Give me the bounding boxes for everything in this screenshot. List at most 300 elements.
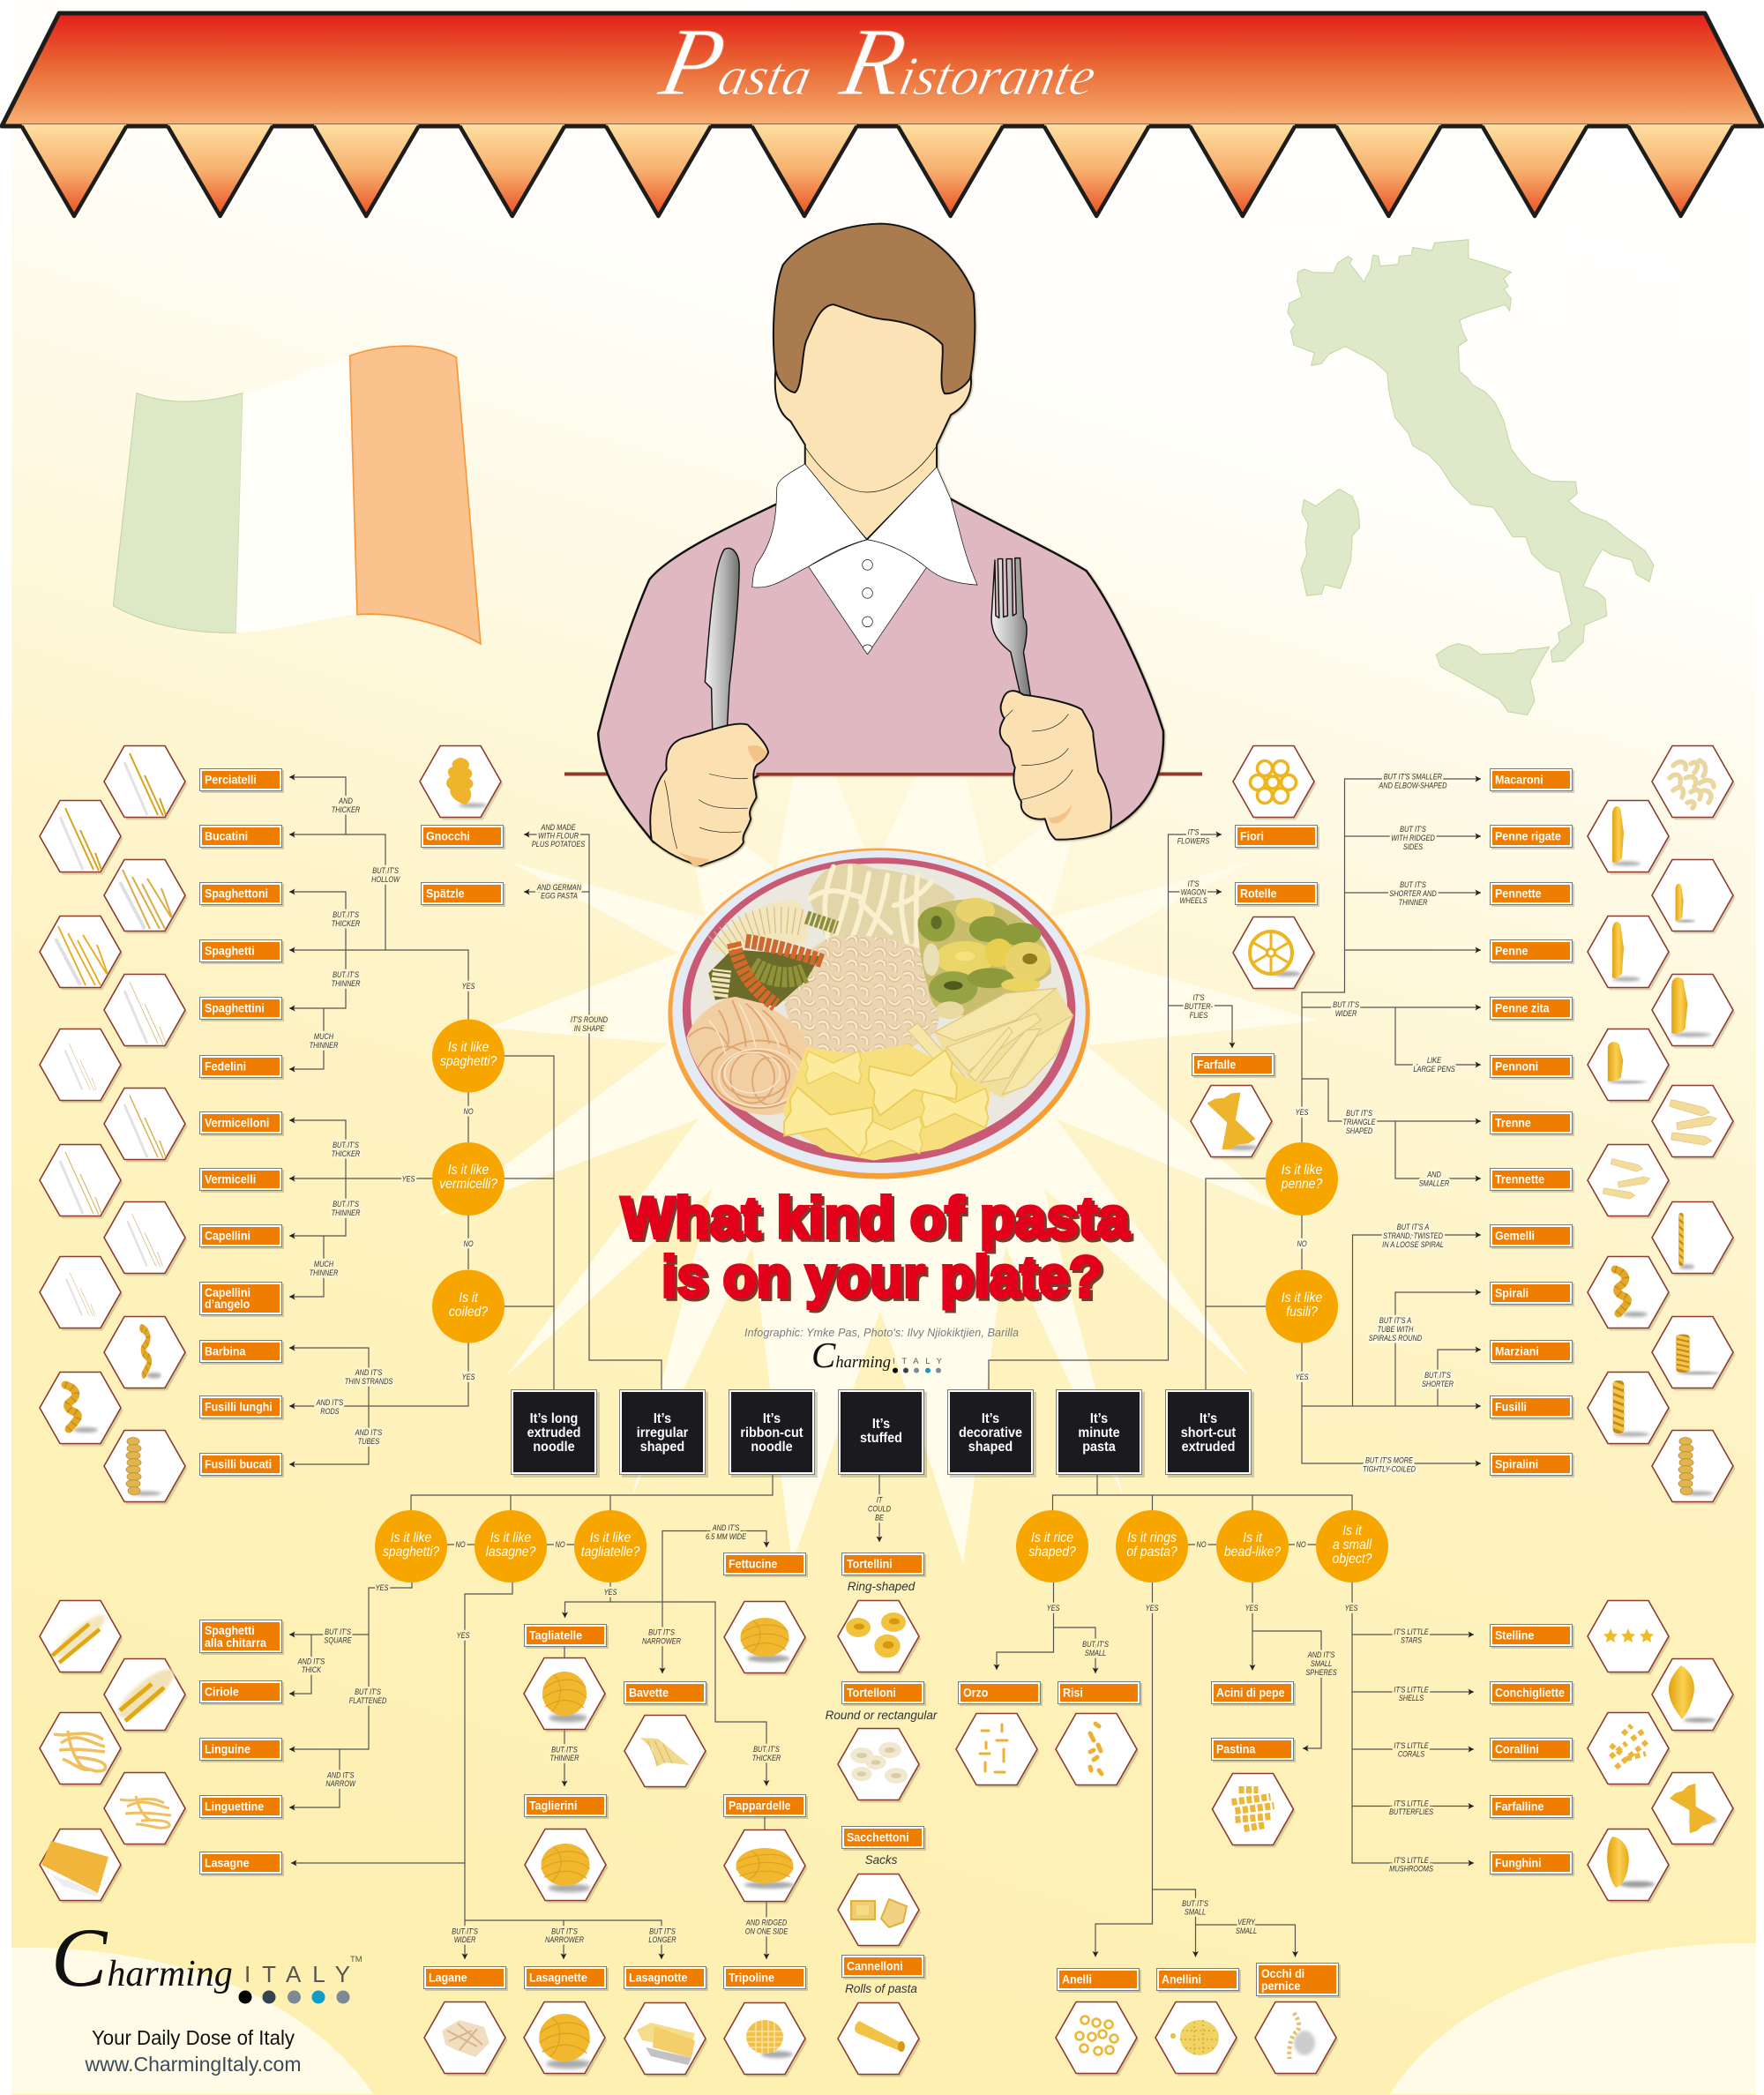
small Charming Italy logo [811, 1335, 943, 1375]
flow labels: minute pasta: STARS [1401, 1635, 1422, 1645]
icon: Gnocchi [420, 746, 503, 820]
category: irregular shaped: shaped [640, 1439, 684, 1455]
name: Capellini [199, 1224, 284, 1249]
icon: Bucatini [40, 801, 123, 875]
flow labels: minute pasta: SMALL [1185, 1907, 1206, 1917]
flow labels: left column: RODS [320, 1406, 340, 1416]
name: Tagliatelle: Tagliatelle [529, 1628, 582, 1642]
name: Pastina [1212, 1738, 1296, 1762]
category: irregular shaped [619, 1390, 708, 1478]
name: Spätzle: Spätzle [426, 887, 465, 901]
icon: Trenne [1652, 1085, 1736, 1159]
flow labels: right column: SHORTER [1422, 1379, 1454, 1388]
category: irregular shaped: irregular [637, 1425, 688, 1440]
name: Capellini: Capellini [205, 1229, 250, 1243]
name: Trenne: Trenne [1495, 1116, 1531, 1130]
flow labels: minute pasta: AND IT'S [1308, 1650, 1334, 1659]
flow labels: right column: AND [1427, 1170, 1441, 1179]
flow labels: left column: PLUS POTATOES [532, 839, 586, 849]
icon: Fusilli bucati [104, 1431, 187, 1505]
icon: Penne rigate [1588, 801, 1671, 875]
name: Taglierini: Taglierini [529, 1799, 577, 1813]
person at table [598, 224, 1163, 866]
Charming Italy logo: TM [350, 1955, 363, 1964]
name: Spirali [1491, 1283, 1574, 1306]
question: Is it like spaghetti? (ribbon): Is it like [391, 1530, 431, 1545]
question: Is it like lasagne?: Is it like [490, 1530, 531, 1545]
name: Macaroni: Macaroni [1495, 773, 1544, 787]
flow labels: right column: TUBE WITH [1378, 1324, 1414, 1334]
name: Rotelle: Rotelle [1240, 887, 1277, 901]
flow labels: left column: HOLLOW [371, 874, 400, 884]
flow labels: minute pasta: IT'S LITTLE [1394, 1627, 1429, 1636]
name: Linguine: Linguine [205, 1742, 250, 1756]
flow labels: left column: BUT IT'S [333, 909, 359, 919]
connectors: ribbon-cut noodle tree [289, 1475, 773, 1959]
icon: Cannelloni [838, 2002, 921, 2076]
name: Fusilli lunghi: Fusilli lunghi [205, 1400, 273, 1414]
flow labels: minute pasta: SMALL [1311, 1658, 1332, 1668]
name: Fettucine: Fettucine [729, 1557, 777, 1571]
flow labels: right column: BUT IT'S [1424, 1370, 1451, 1380]
category: stuffed: stuffed [860, 1430, 902, 1446]
icon: Tagliatelle [524, 1658, 607, 1732]
name: Fusilli: Fusilli [1495, 1400, 1527, 1414]
name: Lasagnotte: Lasagnotte [629, 1971, 687, 1985]
flow labels: right column: WHEELS [1179, 895, 1207, 905]
name: Ciriole: Ciriole [205, 1685, 239, 1699]
name: Spaghettini: Spaghettini [205, 1001, 265, 1015]
flow labels: right column: BUT IT'S [1400, 824, 1426, 834]
icon: Vermicelli [40, 1145, 123, 1219]
flow labels: right column: BUT IT'S [1400, 879, 1426, 889]
flow labels: left column: AND GERMAN [537, 882, 581, 892]
flow labels: minute pasta [1047, 1539, 1433, 1935]
icon: Bavette [624, 1715, 707, 1789]
flow labels: ribbon-cut and stuffed: FLATTENED [349, 1695, 386, 1705]
question: Is it rings of pasta?: Is it rings [1127, 1530, 1177, 1545]
stuffed pasta caption: Sacks: Sacks [865, 1853, 898, 1867]
flow labels: minute pasta: IT'S LITTLE [1394, 1685, 1429, 1695]
flow labels: right column: SIDES [1403, 842, 1423, 851]
question: Is it a small object?: Is it [1342, 1523, 1363, 1538]
name: Lasagnotte [624, 1967, 708, 1991]
connectors: long extruded noodle tree [289, 777, 554, 1464]
flow labels: left column: AND IT'S [355, 1427, 382, 1437]
question: Is it like spaghetti? [432, 1020, 505, 1092]
small Charming Italy logo: Charming [811, 1335, 891, 1375]
shirt buttons [863, 560, 872, 655]
chin line [805, 446, 937, 492]
flow labels: minute pasta: IT'S LITTLE [1394, 1855, 1429, 1865]
farfalle [781, 1044, 990, 1160]
category: ribbon-cut noodle: noodle [751, 1439, 793, 1455]
name: Fusilli bucati [199, 1454, 284, 1478]
flow labels: ribbon-cut and stuffed: ON ONE SIDE [745, 1927, 789, 1936]
flow labels: left column: NO [464, 1238, 474, 1248]
plate of pasta photo [668, 848, 1090, 1179]
banner title: Ristorante [832, 9, 1109, 116]
banner title [651, 9, 1109, 116]
flow labels: minute pasta: SPHERES [1305, 1667, 1337, 1677]
name: Lasagne [199, 1852, 284, 1876]
category: ribbon-cut noodle [729, 1390, 818, 1478]
name: Cannelloni [841, 1955, 926, 1979]
category: ribbon-cut noodle: It’s [763, 1410, 781, 1426]
name: Risi: Risi [1063, 1686, 1083, 1700]
banner title: Pasta [651, 9, 825, 116]
icon: Linguettine [104, 1773, 187, 1847]
spaghetti nest [686, 995, 816, 1115]
right collar [868, 467, 977, 585]
icon: Spaghetti [40, 916, 123, 990]
icon: Gemelli [1652, 1201, 1736, 1276]
tricolour fusilli [708, 917, 837, 1006]
flow labels: ribbon-cut and stuffed [297, 1495, 891, 1944]
flow labels: left column: BUT IT'S [333, 1199, 359, 1208]
name: Perciatelli [199, 769, 284, 793]
stuffed pasta caption: Ring-shaped: Ring-shaped [848, 1580, 916, 1593]
flow labels: left column: AND IT'S [317, 1397, 343, 1407]
icon: Tortellini [838, 1600, 921, 1674]
icon: Farfalline [1652, 1773, 1736, 1847]
name: Pennette [1491, 882, 1574, 907]
name: Linguettine: Linguettine [205, 1799, 264, 1814]
question: Is it coiled?: coiled? [449, 1305, 489, 1320]
flow labels: left column: THIN STRANDS [345, 1376, 393, 1386]
icon: Fusilli [1588, 1373, 1671, 1447]
name: Anelli [1057, 1969, 1141, 1993]
connectors: irregular shaped tree [524, 834, 662, 1389]
flow labels: right column: IT'S [1193, 992, 1204, 1002]
flow labels: ribbon-cut and stuffed: YES [604, 1587, 617, 1597]
question: Is it like spaghetti?: spaghetti? [440, 1054, 497, 1069]
category: short-cut extruded: short-cut [1181, 1425, 1236, 1440]
table edge [564, 773, 1202, 776]
flow labels: right column: BUT IT'S [1333, 999, 1359, 1009]
flow labels: ribbon-cut and stuffed: YES [457, 1630, 470, 1640]
name: Stelline: Stelline [1495, 1628, 1534, 1642]
icon: Ciriole [104, 1658, 187, 1732]
name: Penne rigate [1491, 826, 1574, 849]
flow labels: right column: WAGON [1181, 887, 1207, 897]
icon: Fettucine [724, 1602, 808, 1676]
question: Is it like penne?: penne? [1281, 1177, 1323, 1192]
flow labels: left column: MUCH [314, 1259, 333, 1268]
icon: Spaghettini [104, 974, 187, 1048]
category: ribbon-cut noodle: ribbon-cut [740, 1425, 804, 1440]
name: Linguettine [199, 1796, 284, 1820]
hair [774, 224, 975, 393]
icon: Lasagnotte [624, 2002, 707, 2076]
name: Pappardelle: Pappardelle [729, 1799, 791, 1813]
flow labels: minute pasta: IT'S LITTLE [1394, 1740, 1429, 1750]
category: short-cut extruded: extruded [1182, 1439, 1235, 1455]
flow labels: left column: WITH FLOUR [538, 831, 579, 841]
icon: Linguine [40, 1713, 123, 1787]
flow labels: right column: LARGE PENS [1413, 1064, 1455, 1074]
name: Lasagnette [524, 1967, 609, 1991]
name: Corallini: Corallini [1495, 1742, 1539, 1756]
sweater hem [757, 773, 1017, 775]
name: Spaghetti alla chitarra: alla chitarra [205, 1635, 267, 1650]
question: Is it rice shaped? [1016, 1510, 1088, 1582]
icon: Pennette [1652, 859, 1736, 933]
name: Perciatelli: Perciatelli [205, 773, 257, 787]
flow labels: minute pasta: VERY [1237, 1917, 1255, 1927]
name: Tortellini: Tortellini [847, 1557, 893, 1571]
name: Ciriole [199, 1681, 284, 1705]
flow labels: left column: BUT IT'S [333, 1140, 359, 1149]
flow labels: left column: YES [402, 1174, 415, 1184]
name: Gemelli [1491, 1224, 1574, 1249]
category: long extruded noodle [512, 1390, 600, 1478]
flow labels: ribbon-cut and stuffed: NARROW [325, 1778, 356, 1788]
flow labels: right column: SMALLER [1419, 1178, 1449, 1188]
name: Tortellini [841, 1553, 926, 1577]
flow labels: right column: WIDER [1335, 1008, 1357, 1018]
question: Is it like penne? [1266, 1142, 1338, 1216]
category: stuffed [838, 1390, 927, 1478]
flow labels: right column [1177, 772, 1455, 1474]
penne [908, 988, 1073, 1098]
icon: Pappardelle [724, 1829, 808, 1904]
flow labels: minute pasta: SMALL [1085, 1648, 1106, 1657]
icon: Orzo [956, 1713, 1039, 1787]
name: Rotelle [1235, 882, 1319, 907]
name: Anellini [1157, 1969, 1241, 1993]
connectors: short-cut extruded tree [1206, 779, 1481, 1463]
flag [113, 346, 481, 644]
macaroni pile [783, 935, 940, 1058]
flow labels: right column: NO [1297, 1238, 1307, 1248]
name: Fusilli lunghi [199, 1395, 284, 1420]
icon: Lagane [424, 2002, 508, 2076]
name: Conchigliette: Conchigliette [1495, 1686, 1565, 1700]
category: short-cut extruded [1166, 1390, 1254, 1478]
flow labels: right column: TRIANGLE [1343, 1117, 1376, 1126]
icon: Risi [1056, 1713, 1140, 1787]
right hand details [1005, 710, 1073, 823]
name: Spaghettini [199, 997, 284, 1021]
right hand [1000, 691, 1111, 840]
name: Tagliatelle [524, 1625, 609, 1649]
question: Is it like tagliatelle?: tagliatelle? [581, 1545, 640, 1560]
name: Farfalline [1491, 1796, 1574, 1820]
flow labels: right column: BUT IT'S MORE [1365, 1455, 1413, 1465]
name: Fettucine [723, 1553, 808, 1577]
name: Fusilli [1491, 1395, 1574, 1420]
flow labels: right column: SPIRALS ROUND [1369, 1333, 1422, 1343]
icon: Vermicelloni [104, 1089, 187, 1163]
name: Barbina: Barbina [205, 1344, 246, 1358]
name: Tortelloni [841, 1681, 926, 1706]
name: Pennette: Pennette [1495, 887, 1542, 901]
flow labels: minute pasta: YES [1245, 1603, 1259, 1612]
name: Lasagne: Lasagne [205, 1856, 250, 1870]
flow labels: left column: THICKER [332, 918, 360, 928]
question: Is it bead-like? [1216, 1510, 1289, 1582]
category: minute pasta: It’s [1090, 1410, 1108, 1426]
stuffed pasta caption: Rolls of pasta: Rolls of pasta [845, 1982, 917, 1995]
flow labels: right column: WITH RIDGED [1391, 833, 1435, 842]
name: Vermicelloni: Vermicelloni [205, 1116, 269, 1130]
icon: Anelli [1056, 2002, 1140, 2076]
name: Vermicelloni [199, 1111, 284, 1136]
name: Capellini d'angelo [199, 1283, 284, 1317]
question: Is it like fusili?: fusili? [1286, 1305, 1319, 1320]
question: Is it like vermicelli?: Is it like [448, 1163, 489, 1178]
question: Is it a small object?: a small [1333, 1538, 1372, 1553]
name: Penne zita [1491, 997, 1574, 1021]
category: minute pasta: minute [1078, 1425, 1120, 1440]
flow labels: ribbon-cut and stuffed: IT [877, 1495, 882, 1505]
left hand [650, 724, 768, 866]
flow labels: ribbon-cut and stuffed: BUT IT'S [355, 1687, 381, 1696]
name: Stelline [1491, 1625, 1574, 1649]
flow labels: minute pasta: BUTTERFLIES [1389, 1807, 1433, 1816]
flow labels: minute pasta: YES [1047, 1603, 1060, 1612]
flow labels: left column: MUCH [314, 1031, 333, 1041]
flow labels: minute pasta: MUSHROOMS [1389, 1864, 1433, 1874]
name: Lagane [423, 1967, 508, 1991]
pale fusilli [711, 901, 807, 954]
name: Capellini d'angelo: d’angelo [205, 1297, 250, 1311]
question: Is it like spaghetti? (ribbon): spaghetti? [383, 1545, 440, 1560]
question: Is it rings of pasta? [1116, 1510, 1188, 1582]
name: Orzo: Orzo [963, 1686, 988, 1700]
flow labels: right column: IT'S [1188, 827, 1200, 837]
flow labels: minute pasta: YES [1146, 1603, 1159, 1612]
name: Pennoni [1491, 1055, 1574, 1080]
flow labels: ribbon-cut and stuffed: BUT IT'S [551, 1927, 578, 1936]
flow labels: left column: NO [464, 1106, 474, 1116]
category: decorative shaped: shaped [968, 1439, 1013, 1455]
main title: is on your plate? [662, 1244, 1102, 1309]
name: Fiori: Fiori [1240, 829, 1264, 843]
icon: Farfalle [1191, 1085, 1274, 1159]
category: long extruded noodle: extruded [527, 1425, 580, 1440]
flow labels: right column: BUT IT'S SMALLER [1384, 772, 1442, 782]
flow labels: minute pasta: SMALL [1236, 1926, 1257, 1935]
flow labels: left column: TUBES [358, 1436, 380, 1446]
name: Spaghetti [199, 940, 284, 964]
name: Penne zita: Penne zita [1495, 1001, 1550, 1015]
question: Is it like tagliatelle? [574, 1510, 647, 1582]
icon: Spaghettoni [104, 859, 187, 933]
name: Lagane: Lagane [429, 1971, 467, 1985]
flow labels: left column: THINNER [310, 1040, 338, 1050]
flow labels: ribbon-cut and stuffed: BUT IT'S [649, 1927, 676, 1936]
flow labels: left column: IN SHAPE [574, 1023, 605, 1033]
flow labels: ribbon-cut and stuffed: YES [376, 1582, 389, 1592]
question: Is it coiled? [432, 1270, 505, 1343]
banner awning [2, 9, 1762, 216]
flow labels: ribbon-cut and stuffed: AND IT'S [298, 1657, 325, 1666]
question: Is it like spaghetti? (ribbon) [375, 1510, 447, 1582]
name: Trennette [1491, 1168, 1574, 1193]
icon: Spiralini [1652, 1431, 1736, 1505]
flow labels: ribbon-cut and stuffed: BUT IT'S [551, 1745, 578, 1755]
flow labels: right column: YES [1296, 1372, 1309, 1381]
flow labels: ribbon-cut and stuffed: THINNER [550, 1753, 579, 1762]
flow labels: right column: YES [1296, 1107, 1309, 1117]
name: Spaghetti alla chitarra: Spaghetti [205, 1623, 255, 1637]
category: minute pasta: pasta [1082, 1439, 1116, 1455]
flow labels: left column: AND MADE [542, 822, 576, 832]
category: stuffed: It’s [872, 1416, 890, 1432]
question: Is it like fusili?: Is it like [1282, 1291, 1322, 1306]
map of Italy [1288, 240, 1654, 715]
flow labels: left column: AND [339, 796, 353, 805]
flow labels: left column [310, 796, 608, 1446]
flow labels: right column: FLOWERS [1177, 836, 1210, 846]
flow labels: ribbon-cut and stuffed: SQUARE [324, 1635, 352, 1645]
flow labels: ribbon-cut and stuffed: COULD [868, 1504, 891, 1514]
name: Spätzle [422, 882, 505, 907]
flow labels: ribbon-cut and stuffed: NARROWER [545, 1934, 584, 1944]
name: Spaghettoni [199, 882, 284, 907]
flow labels: ribbon-cut and stuffed: AND IT'S [327, 1770, 354, 1780]
name: Gnocchi [422, 826, 505, 849]
flow labels: right column: BUTTER- [1185, 1001, 1213, 1011]
Charming Italy logo [51, 1911, 363, 2076]
icon: Lasagnette [524, 2002, 607, 2076]
name: Penne [1491, 940, 1574, 964]
flow labels: ribbon-cut and stuffed: NARROWER [642, 1636, 681, 1646]
flow labels: ribbon-cut and stuffed: THICK [302, 1665, 321, 1674]
flow labels: ribbon-cut and stuffed: WIDER [454, 1934, 475, 1944]
icon: Capellini [104, 1201, 187, 1276]
flow labels: right column: SHORTER AND [1389, 888, 1437, 898]
flow labels: minute pasta: BUT IT'S [1082, 1639, 1109, 1649]
plate rim [668, 848, 1090, 1179]
icon: Tortelloni [838, 1729, 921, 1803]
icon: Fiori [1233, 746, 1316, 820]
flow labels: ribbon-cut and stuffed: BUT IT'S [325, 1627, 351, 1636]
flow labels: minute pasta: NO [1297, 1539, 1306, 1549]
flow labels: left column: AND IT'S [355, 1367, 382, 1377]
name: Anelli: Anelli [1062, 1972, 1092, 1987]
name: Penne: Penne [1495, 944, 1528, 958]
flow labels: left column: YES [462, 981, 475, 991]
icon: Acini-style Pastina [1212, 1773, 1296, 1847]
icon: Anellini [1155, 2002, 1238, 2076]
flow labels: right column: TIGHTLY-COILED [1363, 1464, 1416, 1474]
name: Bucatini: Bucatini [205, 829, 248, 843]
icon: Taglierini [525, 1829, 609, 1904]
name: Acini di pepe: Acini di pepe [1216, 1686, 1285, 1700]
icon: Fedelini [40, 1029, 123, 1103]
fork [991, 558, 1031, 700]
flow labels: minute pasta: IT'S LITTLE [1394, 1799, 1429, 1808]
flow labels: right column: SHAPED [1346, 1126, 1372, 1135]
name: Fedelini: Fedelini [205, 1059, 246, 1074]
icon: Fusilli lunghi [40, 1373, 123, 1447]
question: Is it like vermicelli?: vermicelli? [439, 1177, 498, 1192]
flow labels: ribbon-cut and stuffed: BE [875, 1513, 884, 1523]
question: Is it like fusili? [1266, 1270, 1338, 1343]
icon: Capellini d'angelo [40, 1256, 123, 1330]
icon: Barbina [104, 1316, 187, 1390]
name: Linguine [199, 1738, 284, 1762]
name: Marziani: Marziani [1495, 1344, 1539, 1358]
icon: Sacchettoni [838, 1874, 921, 1948]
flow labels: ribbon-cut and stuffed: AND IT'S [713, 1523, 739, 1532]
question: Is it a small object?: object? [1333, 1552, 1372, 1567]
name: Vermicelli: Vermicelli [205, 1172, 256, 1186]
name: Tortelloni: Tortelloni [847, 1686, 896, 1700]
